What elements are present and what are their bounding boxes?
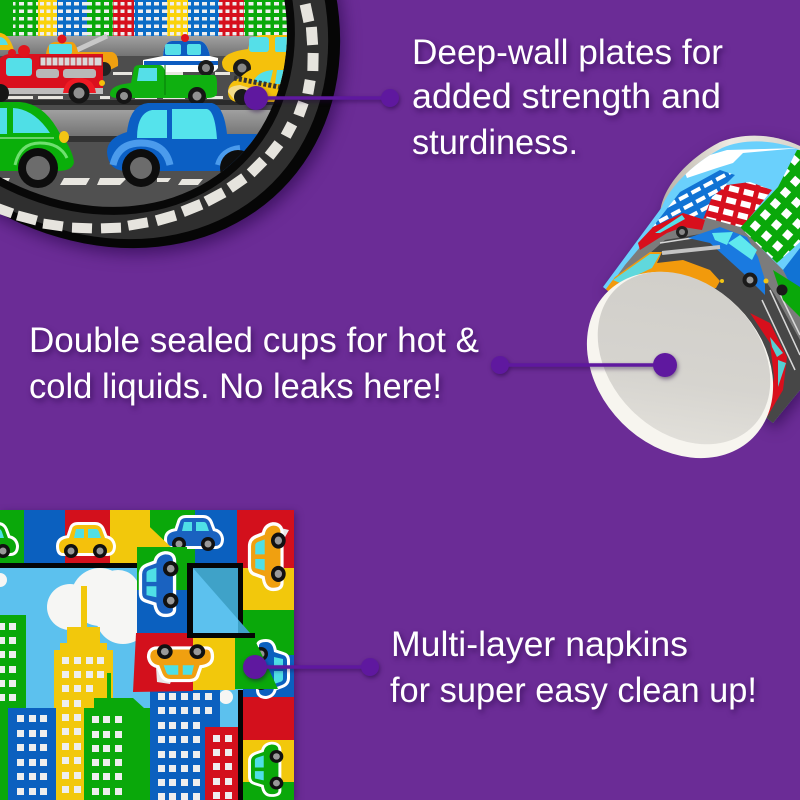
right border squares: [237, 510, 294, 800]
skyline buildings: [0, 0, 290, 36]
blue car: [688, 227, 768, 295]
rim road dashes: [0, 3, 319, 233]
highway: [0, 36, 287, 207]
panel: plate: [0, 0, 352, 262]
top border squares: [0, 510, 237, 563]
callout text: cups: cold liquids. No leaks here!: [29, 367, 442, 406]
cup wall: [603, 141, 800, 431]
napkin skyline: [0, 586, 238, 800]
green car right: [773, 270, 800, 317]
callout text: napkins: Multi-layer napkins: [391, 625, 688, 664]
cup base: [549, 234, 800, 496]
orange car: [606, 252, 724, 292]
police car: [143, 34, 218, 76]
callout text: cups: Double sealed cups for hot &: [29, 321, 479, 360]
fire truck: [0, 45, 105, 104]
cup rim: [660, 136, 800, 232]
panel: napkin: [0, 510, 294, 800]
napkin sheet: [0, 510, 294, 800]
callout text: plates: added strength and: [412, 77, 721, 116]
callout text: plates: sturdiness.: [412, 123, 578, 162]
tow truck: [46, 34, 118, 76]
clouds: [0, 568, 233, 704]
connector: napkin: [243, 655, 379, 679]
frame lines: [0, 563, 243, 800]
flap window: [187, 563, 255, 638]
blue car: [107, 103, 262, 187]
callout text: plates: Deep-wall plates for: [412, 33, 723, 72]
cup body: [603, 136, 800, 431]
plate scene: [0, 0, 287, 207]
yellow cab far left: [0, 33, 14, 50]
tow crane: [662, 247, 720, 253]
panel: cup: [586, 136, 800, 458]
red car lower: [750, 313, 787, 417]
callout text: napkins: for super easy clean up!: [390, 671, 757, 710]
connector: cup: [491, 353, 677, 377]
napkin cars: [0, 518, 289, 794]
plate rim: [0, 0, 444, 352]
folded corner flap: [133, 513, 278, 692]
taxi: [228, 66, 284, 105]
flap cars: [142, 554, 211, 684]
red car top: [638, 213, 705, 250]
green pickup: [110, 65, 217, 105]
yellow car right: [222, 35, 292, 77]
connector: plate: [244, 86, 399, 110]
green car left: [0, 102, 74, 188]
